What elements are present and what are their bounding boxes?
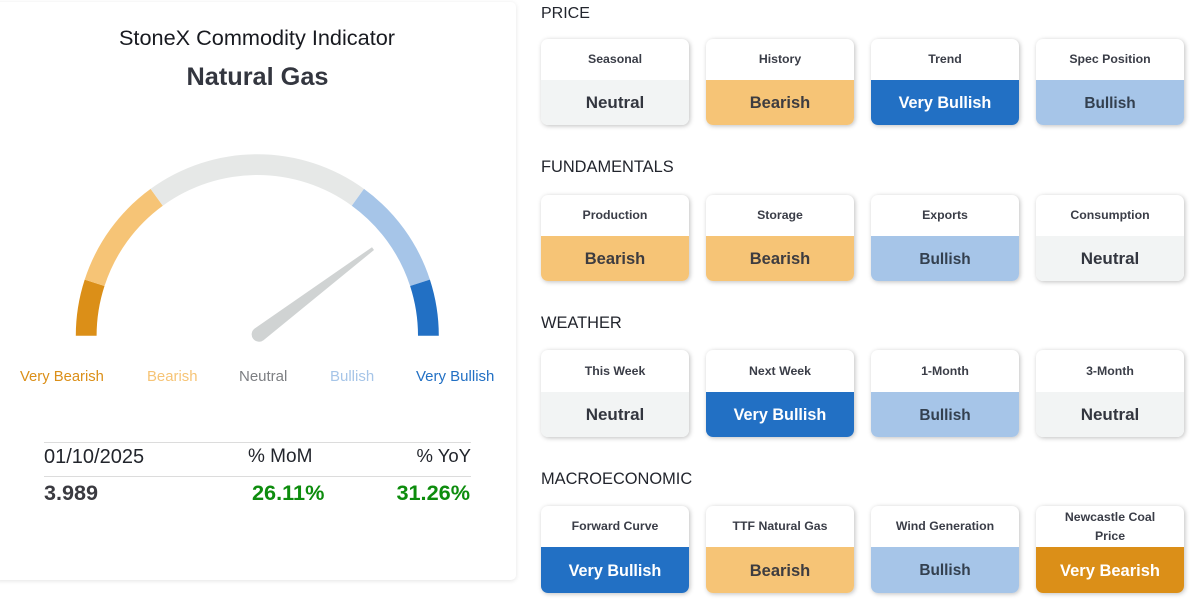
card: TTF natural gas: TTF Natural Gas xyxy=(732,519,827,533)
card: newcastle coal price xyxy=(1036,506,1184,593)
title: StoneX Commodity Indicator xyxy=(119,25,395,50)
card: wind generation xyxy=(871,506,1019,593)
card: this week xyxy=(541,350,689,437)
card: spec position: Spec Position xyxy=(1069,52,1151,66)
panel: gauge summary xyxy=(0,2,516,580)
card: next week xyxy=(706,350,854,437)
card: wind generation: Bullish xyxy=(919,562,971,579)
stat: YoY change: 31.26% xyxy=(396,480,470,505)
card: storage xyxy=(706,195,854,281)
gauge segment: neutral xyxy=(151,154,364,206)
card: seasonal: Neutral xyxy=(586,93,644,112)
card: trend: Trend xyxy=(928,52,962,66)
gauge segment: bullish xyxy=(352,189,430,286)
card: production: Bearish xyxy=(585,250,645,268)
legend: very bullish: Very Bullish xyxy=(416,368,494,385)
card: this week: This Week xyxy=(585,364,645,378)
gauge segment: very bullish xyxy=(410,280,439,336)
subtitle: commodity name: Natural Gas xyxy=(186,63,328,91)
card: spec position xyxy=(1036,39,1184,125)
card: 1-month xyxy=(871,350,1019,437)
card: TTF natural gas: Bearish xyxy=(750,562,810,580)
card: history: Bearish xyxy=(750,94,810,112)
gauge segment: very bearish xyxy=(76,280,104,336)
heading: macroeconomic: MACROECONOMIC xyxy=(541,470,692,488)
stats header: month over month: % MoM xyxy=(248,446,312,467)
card: consumption: Neutral xyxy=(1081,249,1139,268)
card: TTF natural gas xyxy=(706,506,854,593)
card: wind generation: Wind Generation xyxy=(896,519,994,533)
gauge needle xyxy=(252,247,374,342)
legend: bullish: Bullish xyxy=(330,368,374,385)
card: 3-month xyxy=(1036,350,1184,437)
stats header: year over year: % YoY xyxy=(416,445,471,466)
card: 1-month: 1-Month xyxy=(921,364,969,378)
card: forward curve: Very Bullish xyxy=(569,562,661,580)
card: next week: Next Week xyxy=(749,364,811,378)
legend: neutral: Neutral xyxy=(239,368,287,385)
card: 1-month: Bullish xyxy=(919,407,971,424)
card: exports: Exports xyxy=(922,208,968,222)
card: newcastle coal price: Price xyxy=(1095,528,1125,542)
gauge chart xyxy=(76,154,439,342)
gauge legend xyxy=(20,368,494,385)
stats header: date: 01/10/2025 xyxy=(44,446,144,468)
card: storage: Storage xyxy=(757,208,803,222)
card: history: History xyxy=(759,52,801,66)
legend: bearish: Bearish xyxy=(147,369,198,385)
gauge segment: bearish xyxy=(85,189,163,286)
stat: MoM change: 26.11% xyxy=(252,480,324,505)
card: seasonal: Seasonal xyxy=(588,52,642,66)
card: spec position: Bullish xyxy=(1084,95,1136,112)
card: 3-month: Neutral xyxy=(1081,405,1139,424)
card: production: Production xyxy=(583,208,647,222)
card: exports: Bullish xyxy=(919,251,971,268)
card: consumption xyxy=(1036,195,1184,281)
card: this week: Neutral xyxy=(586,405,644,424)
heading: fundamentals: FUNDAMENTALS xyxy=(541,158,674,176)
card: next week: Very Bullish xyxy=(734,406,826,424)
heading: price: PRICE xyxy=(541,5,590,22)
card: seasonal xyxy=(541,39,689,125)
card: storage: Bearish xyxy=(750,250,810,268)
card: forward curve xyxy=(541,506,689,593)
card: trend xyxy=(871,39,1019,125)
card: consumption: Consumption xyxy=(1070,208,1150,222)
card: exports xyxy=(871,195,1019,281)
card: trend: Very Bullish xyxy=(899,94,991,112)
card: 3-month: 3-Month xyxy=(1086,364,1134,378)
legend: very bearish: Very Bearish xyxy=(20,369,104,385)
card: newcastle coal price: Very Bearish xyxy=(1060,562,1160,580)
card: history xyxy=(706,39,854,125)
card: newcastle coal price: Newcastle Coal xyxy=(1065,510,1155,524)
card: production xyxy=(541,195,689,281)
card: forward curve: Forward Curve xyxy=(572,519,658,533)
stat: price: 3.989 xyxy=(44,480,98,505)
heading: weather: WEATHER xyxy=(541,314,622,332)
